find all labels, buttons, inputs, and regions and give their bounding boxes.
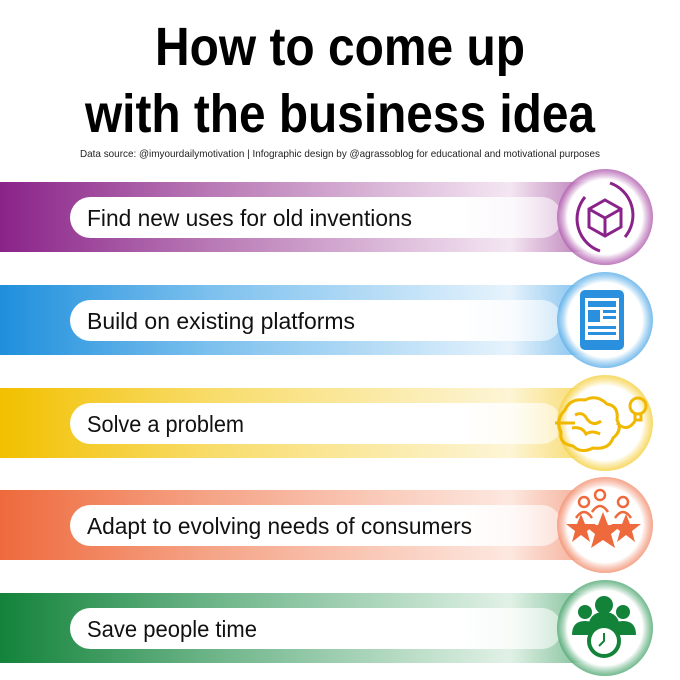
icon: rotating box bbox=[577, 183, 633, 251]
icon: brain and bulb bbox=[555, 398, 646, 451]
icon: people and stars bbox=[566, 490, 641, 548]
title: with the business idea bbox=[84, 84, 596, 144]
panel: build on platforms: Build on existing platforms bbox=[87, 308, 355, 334]
panel: find new uses: Find new uses for old inventions bbox=[87, 205, 412, 231]
panel: find new uses bbox=[0, 169, 653, 265]
panel: save time bbox=[0, 580, 653, 676]
panel: solve a problem: Solve a problem bbox=[87, 411, 244, 437]
title bbox=[84, 17, 596, 144]
title: How to come up bbox=[155, 17, 525, 77]
panel: save time: Save people time bbox=[87, 616, 257, 642]
icon: tablet bbox=[580, 290, 624, 350]
panel: adapt to consumers: Adapt to evolving needs of consumers bbox=[87, 513, 472, 539]
panel: solve a problem bbox=[0, 375, 653, 471]
panel: adapt to consumers bbox=[0, 477, 653, 573]
panel: build on platforms bbox=[0, 272, 653, 368]
subtitle: data source: Data source: @imyourdailymotivation | Infographic design by @agrassoblog for educational and motivational purposes bbox=[80, 148, 600, 160]
icon: people with clock bbox=[572, 596, 636, 656]
